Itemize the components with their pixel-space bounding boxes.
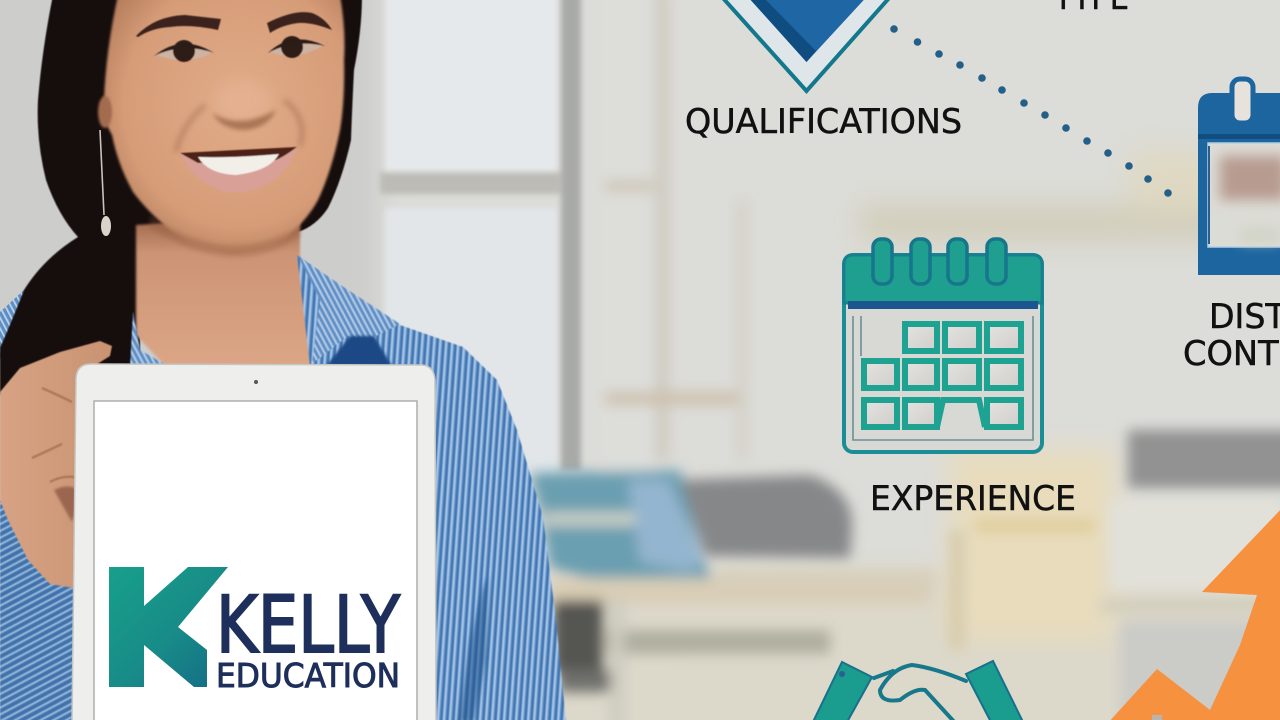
calendar window <box>1208 143 1280 247</box>
thumb shadow <box>54 486 82 522</box>
smile creases <box>176 100 302 152</box>
cuff details <box>839 671 845 677</box>
sleeve fold <box>458 575 488 720</box>
hair <box>0 0 362 395</box>
eye left <box>154 40 214 62</box>
icon: district calendar <box>1198 79 1280 275</box>
icon: growth arrow <box>1107 505 1280 720</box>
eyebrow right <box>267 12 332 33</box>
logo word KELLY: KELLY <box>216 581 400 671</box>
calendar left inner line <box>1208 146 1210 244</box>
hands outline <box>874 665 966 720</box>
nose shadow <box>212 110 276 130</box>
eyebrow left <box>136 15 221 37</box>
collar left <box>130 312 168 366</box>
eye right <box>268 36 325 58</box>
tablet screen <box>94 401 417 720</box>
collar right <box>298 256 400 364</box>
label: qualifications: QUALIFICATIONS <box>685 102 962 142</box>
logo: Kelly Education <box>109 567 400 695</box>
hand holding tablet <box>0 341 112 588</box>
logo K mark <box>109 567 228 687</box>
face <box>104 0 344 254</box>
shirt body <box>297 255 566 720</box>
tablet camera <box>254 380 258 384</box>
shirt left shoulder <box>0 290 24 360</box>
shirt left sleeve <box>0 500 80 720</box>
calendar blurred contents <box>1220 156 1280 242</box>
earring <box>100 130 104 215</box>
person <box>0 0 566 720</box>
tablet <box>72 364 436 720</box>
right cuff <box>966 661 1024 720</box>
dotted connector <box>890 25 1172 197</box>
icon: qualifications shield <box>722 0 890 91</box>
collar interior <box>326 336 392 366</box>
icon: handshake <box>812 661 1024 720</box>
icon: experience calendar <box>844 239 1042 452</box>
arrow notch <box>1152 715 1162 720</box>
finger creases <box>32 388 80 482</box>
calendar header <box>844 255 1042 303</box>
left cuff <box>812 662 872 720</box>
calendar header shade <box>1198 134 1280 139</box>
logo word EDUCATION: EDUCATION <box>216 656 400 695</box>
ear shadow <box>98 96 112 128</box>
under chin shade <box>150 215 300 257</box>
tablet frame <box>72 364 436 720</box>
calendar inner frame <box>853 316 1033 440</box>
mouth <box>180 147 297 193</box>
calendar grid <box>864 324 1021 427</box>
calendar body <box>844 255 1042 452</box>
label: experience: EXPERIENCE <box>870 479 1076 519</box>
calendar dark band <box>848 301 1038 309</box>
nose highlight <box>215 80 271 120</box>
calendar ring <box>1232 79 1253 123</box>
calendar rings <box>873 239 1006 284</box>
neck <box>136 215 320 366</box>
